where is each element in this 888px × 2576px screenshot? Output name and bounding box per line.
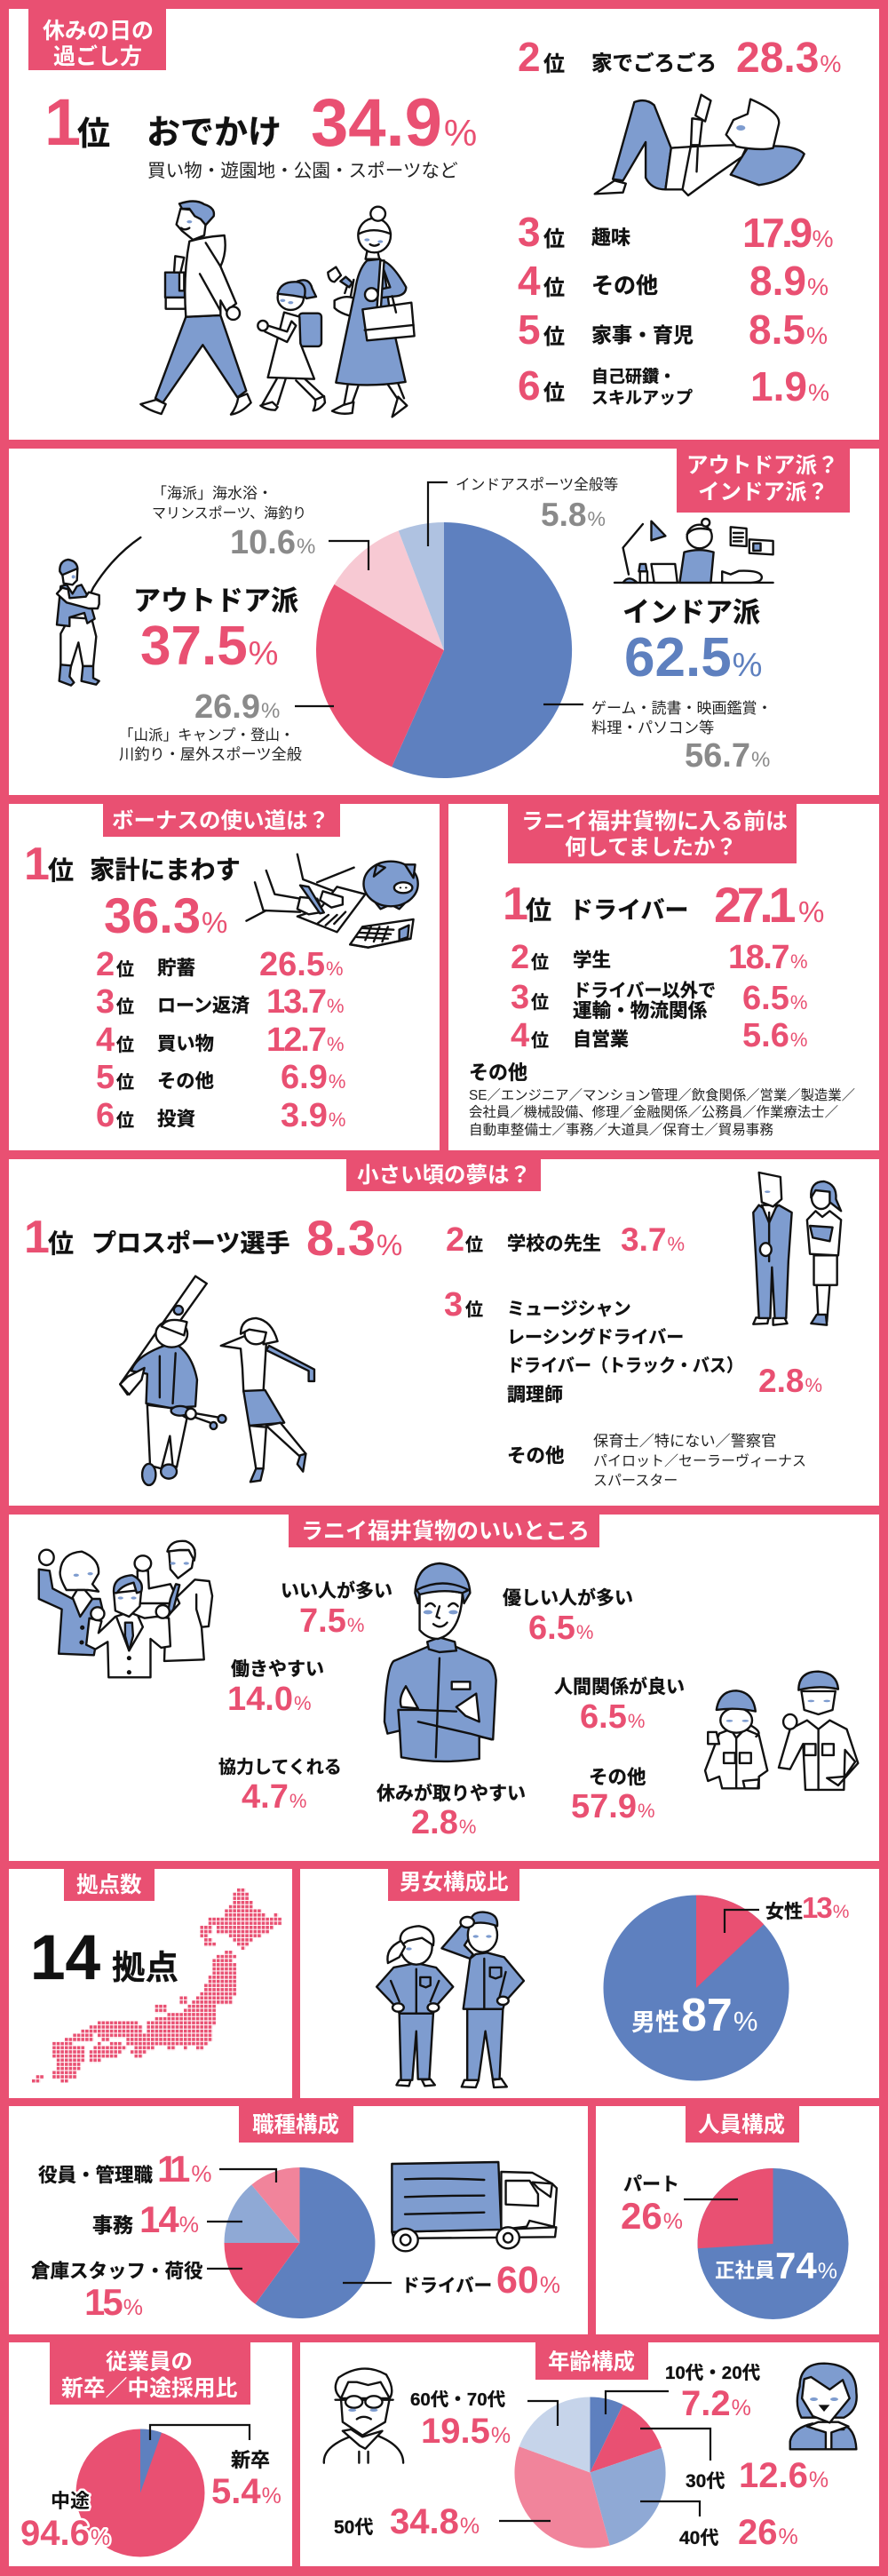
callout: mountain: 26.9% bbox=[194, 688, 280, 726]
rank 3 row: ミュージシャン bbox=[507, 1300, 631, 1319]
rank 3 row: 位 bbox=[531, 992, 549, 1013]
icon: person at desk bbox=[614, 519, 773, 583]
callout: 50s: 34.8% bbox=[390, 2502, 480, 2541]
heading: holiday: 休みの日の bbox=[43, 19, 154, 44]
heading: previous job: 何してましたか？ bbox=[565, 835, 737, 860]
heading: age: 年齢構成 bbox=[548, 2349, 635, 2374]
callout: 30s: 12.6% bbox=[739, 2456, 829, 2495]
callout: 10s 20s: 7.2% bbox=[681, 2384, 751, 2423]
rank 5 row bbox=[518, 306, 828, 353]
heading: dream: 小さい頃の夢は？ bbox=[357, 1163, 531, 1188]
rank 5 row: 家事・育児 bbox=[591, 323, 694, 346]
rank 5 row: その他 bbox=[157, 1070, 214, 1092]
rank 2 row bbox=[518, 34, 841, 82]
item: kind people bbox=[503, 1587, 633, 1647]
callout: 60s 70s: 60代・70代 bbox=[410, 2389, 505, 2410]
icon: business pair bbox=[753, 1173, 841, 1325]
rank 1 row bbox=[44, 85, 477, 161]
item: other: 57.9% bbox=[571, 1788, 655, 1825]
icon: male and female worker bbox=[377, 1912, 524, 2087]
rank 4 row bbox=[518, 258, 829, 304]
rank 2 row: 位 bbox=[543, 52, 565, 76]
callout: 50s: 50代 bbox=[334, 2517, 373, 2538]
callout: warehouse: 15% bbox=[84, 2281, 143, 2323]
item: other: その他 bbox=[589, 1767, 646, 1788]
item: kind people: 6.5% bbox=[528, 1610, 593, 1647]
callout: mountain: 「山派」キャンプ・登山・ bbox=[119, 727, 295, 743]
callout: managers: 11 % bbox=[157, 2148, 211, 2190]
panel: outdoor or indoor bbox=[9, 449, 879, 795]
rank 5 row: 5 bbox=[96, 1059, 115, 1096]
indoor total: インドア派 bbox=[622, 597, 760, 628]
pie chart: gender bbox=[604, 1896, 789, 2080]
callout: full-time bbox=[715, 2245, 837, 2286]
callout: games: ゲーム・読書・映画鑑賞・ bbox=[591, 700, 773, 717]
rank 2 row bbox=[511, 939, 807, 976]
item: nice people bbox=[281, 1580, 392, 1640]
callout: 40s bbox=[640, 2501, 798, 2552]
rank 4 row bbox=[96, 1022, 344, 1059]
rank 3 row bbox=[444, 1286, 822, 1405]
rank 3 row: 13.7% bbox=[266, 983, 344, 1021]
other dreams: パイロット／セーラーヴィーナス bbox=[593, 1453, 806, 1469]
rank 2 row: 家でごろごろ bbox=[591, 51, 717, 75]
heading: holiday: 過ごし方 bbox=[53, 44, 142, 69]
rank 2 row bbox=[96, 946, 344, 983]
rank 1 note: 買い物・遊園地・公園・スポーツなど bbox=[147, 161, 458, 181]
callout: sea: 10.6% bbox=[230, 524, 315, 561]
location count: 拠点 bbox=[112, 1949, 178, 1986]
callout: 10s 20s bbox=[606, 2363, 760, 2423]
rank 6 row: 1.9% bbox=[750, 363, 829, 409]
callout: men bbox=[631, 1990, 757, 2041]
rank 3 row: 位 bbox=[543, 227, 565, 251]
callout: women: 女性 bbox=[765, 1902, 803, 1922]
heading: locations: 拠点数 bbox=[76, 1872, 142, 1897]
heading: previous job bbox=[508, 804, 797, 863]
callout: indoor sports: 5.8% bbox=[541, 497, 606, 533]
heading: age bbox=[535, 2342, 648, 2380]
rank 5 row: 6.9% bbox=[281, 1059, 345, 1096]
callout: 60s 70s: 19.5% bbox=[421, 2412, 511, 2451]
heading: staff composition bbox=[686, 2106, 799, 2143]
heading: gender: 男女構成比 bbox=[400, 1870, 508, 1895]
callout: warehouse bbox=[31, 2261, 242, 2323]
rank 1 row bbox=[503, 877, 824, 933]
heading: outdoor indoor: インドア派？ bbox=[698, 481, 829, 505]
rank 2 row: 2 bbox=[446, 1221, 464, 1259]
rank 6 row: 自己研鑽・ bbox=[591, 367, 676, 386]
callout: mountain bbox=[119, 688, 334, 763]
other jobs: その他 bbox=[469, 1061, 527, 1084]
rank 4 row: 8.9% bbox=[749, 258, 829, 304]
rank 6 row: 位 bbox=[543, 381, 565, 405]
item: relationships bbox=[554, 1676, 685, 1736]
callout: 10s 20s: 10代・20代 bbox=[665, 2363, 760, 2383]
callout: sea bbox=[152, 485, 369, 570]
rank 6 row: 6 bbox=[518, 362, 541, 409]
item: cooperation bbox=[218, 1757, 342, 1816]
rank 2 row: 位 bbox=[531, 952, 549, 973]
callout: sea: マリンスポーツ、海釣り bbox=[152, 505, 306, 521]
rank 4 row: 4 bbox=[511, 1017, 529, 1054]
callout: mid-career: 中途 bbox=[51, 2490, 90, 2512]
callout: full-time: 74% bbox=[775, 2245, 837, 2286]
rank 3 row: ドライバー以外で bbox=[573, 981, 716, 1001]
rank 1 row: 1 bbox=[24, 1212, 50, 1263]
item: cooperation: 4.7% bbox=[242, 1778, 306, 1816]
rank 3 row: 2.8% bbox=[758, 1363, 822, 1399]
callout: new grads: 新卒 bbox=[231, 2449, 270, 2471]
rank 2 row: 28.3% bbox=[736, 35, 841, 82]
panel: good points bbox=[9, 1515, 879, 1861]
pie chart: staff composition bbox=[698, 2168, 849, 2319]
item: other bbox=[571, 1767, 655, 1825]
rank 4 row: 位 bbox=[116, 1035, 134, 1055]
rank 2 row: 2 bbox=[96, 946, 115, 983]
item: relationships: 人間関係が良い bbox=[554, 1676, 685, 1697]
heading: locations bbox=[64, 1869, 155, 1901]
callout: part-time bbox=[621, 2174, 738, 2237]
rank 1 row: 27.1% bbox=[714, 877, 824, 933]
rank 3 row: 趣味 bbox=[591, 227, 630, 249]
heading: new grad ratio bbox=[50, 2342, 250, 2405]
icon: truck bbox=[392, 2162, 557, 2251]
dot map of Japan bbox=[32, 1888, 282, 2083]
pie chart: job types bbox=[224, 2167, 375, 2318]
callout: 40s: 26% bbox=[738, 2513, 798, 2552]
outdoor total bbox=[133, 585, 298, 677]
heading: gender bbox=[388, 1869, 519, 1901]
callout: 30s bbox=[640, 2429, 829, 2495]
heading: job types bbox=[239, 2106, 353, 2143]
heading: new grad ratio: 新卒／中途採用比 bbox=[61, 2376, 238, 2401]
rank 2 row: 学校の先生 bbox=[507, 1233, 601, 1254]
panel: childhood dream bbox=[9, 1159, 879, 1506]
callout: mid-career: 94.6% bbox=[20, 2514, 110, 2553]
rank 3 row: レーシングドライバー bbox=[507, 1326, 684, 1348]
item: cooperation: 協力してくれる bbox=[218, 1757, 342, 1777]
heading: previous job: ラニイ福井貨物に入る前は bbox=[521, 809, 788, 834]
callout: 60s 70s bbox=[410, 2389, 558, 2451]
other dreams bbox=[507, 1432, 806, 1489]
callout: new grads: 5.4% bbox=[211, 2472, 281, 2511]
heading: bonus bbox=[103, 804, 340, 837]
rank 6 row bbox=[96, 1097, 345, 1134]
panel: gender bbox=[300, 1869, 879, 2098]
rank 3 row: 3 bbox=[444, 1286, 463, 1324]
rank 5 row: 位 bbox=[116, 1072, 134, 1093]
icon: central worker bbox=[385, 1563, 496, 1761]
rank 3 row: 運輸・物流関係 bbox=[573, 999, 708, 1022]
item: time off: 2.8% bbox=[411, 1804, 476, 1841]
other dreams: 保育士／特にない／警察官 bbox=[593, 1432, 776, 1450]
callout: men: 87% bbox=[681, 1990, 757, 2041]
rank 5 row: 8.5% bbox=[749, 306, 828, 353]
rank 3 row: 3 bbox=[96, 983, 115, 1021]
rank 1 row: プロスポーツ選手 bbox=[91, 1229, 289, 1257]
rank 3 row: 位 bbox=[116, 997, 134, 1017]
callout: office bbox=[92, 2198, 242, 2240]
rank 1 row: 8.3% bbox=[306, 1210, 402, 1266]
callout: games bbox=[543, 700, 773, 775]
item: nice people: いい人が多い bbox=[281, 1580, 392, 1602]
callout: office: 事務 bbox=[92, 2214, 133, 2237]
heading: outdoor indoor: アウトドア派？ bbox=[686, 454, 838, 478]
panel: age composition bbox=[300, 2342, 879, 2566]
callout: women bbox=[725, 1891, 849, 1933]
rank 6 row: 3.9% bbox=[281, 1097, 345, 1134]
rank 3 row: 3 bbox=[511, 979, 529, 1016]
panel: previous job bbox=[448, 804, 879, 1150]
other jobs: SE／エンジニア／マンション管理／飲食関係／営業／製造業／ bbox=[469, 1087, 855, 1103]
callout: part-time: パート bbox=[623, 2174, 679, 2195]
rank 4 row: 12.7% bbox=[266, 1022, 344, 1059]
rank 2 row: 位 bbox=[465, 1235, 483, 1255]
icon: cheering office group bbox=[39, 1541, 212, 1677]
rank 3 row: 3 bbox=[518, 209, 541, 255]
rank 2 row: 26.5% bbox=[259, 946, 344, 983]
callout: sea: 「海派」海水浴・ bbox=[152, 485, 273, 502]
rank 4 row bbox=[511, 1017, 807, 1054]
callout: warehouse: 倉庫スタッフ・荷役 bbox=[31, 2261, 203, 2282]
rank 4 row: その他 bbox=[591, 274, 658, 298]
outdoor total: 37.5% bbox=[140, 616, 278, 677]
item: easy to work: 14.0% bbox=[227, 1681, 312, 1718]
rank 2 row: 3.7% bbox=[621, 1221, 685, 1258]
callout: 30s: 30代 bbox=[686, 2471, 725, 2492]
callout: office: 14% bbox=[139, 2198, 199, 2240]
icon: young woman bbox=[790, 2364, 857, 2449]
rank 3 row: 位 bbox=[465, 1300, 483, 1320]
indoor total bbox=[622, 597, 762, 688]
callout: part-time: 26% bbox=[621, 2195, 683, 2237]
heading: outdoor indoor bbox=[677, 449, 850, 513]
rank 4 row: 買い物 bbox=[157, 1033, 214, 1054]
panel: locations bbox=[9, 1869, 292, 2098]
other jobs: 自動車整備士／事務／大道具／保育士／貿易事務 bbox=[469, 1122, 773, 1138]
callout: games: 56.7% bbox=[685, 737, 770, 775]
heading: holiday bbox=[28, 9, 166, 70]
rank 3 row: 6.5% bbox=[742, 980, 807, 1017]
item: kind people: 優しい人が多い bbox=[503, 1587, 633, 1609]
rank 1 row: 位 bbox=[48, 1229, 74, 1259]
rank 4 row: 4 bbox=[96, 1022, 115, 1059]
item: time off bbox=[377, 1783, 526, 1841]
heading: job types: 職種構成 bbox=[252, 2112, 339, 2137]
rank 2 row: 2 bbox=[518, 34, 541, 80]
rank 1 row: 36.3% bbox=[104, 887, 227, 943]
item: time off: 休みが取りやすい bbox=[377, 1783, 526, 1804]
rank 6 row: 投資 bbox=[157, 1109, 195, 1130]
rank 3 row bbox=[511, 979, 807, 1022]
icon: older man bbox=[324, 2369, 403, 2463]
rank 3 row: ドライバー（トラック・バス） bbox=[507, 1356, 743, 1376]
rank 1 row: 34.9% bbox=[311, 85, 477, 161]
pie chart: new grad ratio bbox=[76, 2429, 204, 2556]
pie chart: age bbox=[514, 2397, 666, 2548]
rank 6 row: 6 bbox=[96, 1097, 115, 1134]
callout: 40s: 40代 bbox=[679, 2528, 718, 2548]
panel: job types bbox=[9, 2106, 588, 2334]
rank 4 row: 自営業 bbox=[573, 1030, 629, 1050]
other dreams: スパースター bbox=[593, 1473, 678, 1489]
item: easy to work: 働きやすい bbox=[231, 1659, 324, 1680]
callout: mid-career bbox=[20, 2490, 110, 2553]
callout: 50s bbox=[334, 2502, 551, 2541]
icon: piggy bank and paperwork bbox=[246, 855, 418, 948]
rank 2 row: 位 bbox=[116, 959, 134, 980]
rank 3 row: ローン返済 bbox=[157, 996, 250, 1016]
icon: pair of workers bbox=[705, 1672, 858, 1790]
rank 6 row bbox=[518, 362, 829, 409]
item: nice people: 7.5% bbox=[299, 1602, 364, 1640]
rank 3 row: 調理師 bbox=[507, 1385, 563, 1405]
callout: indoor sports: インドアスポーツ全般等 bbox=[456, 476, 618, 493]
rank 3 row: 17.9% bbox=[742, 210, 834, 256]
rank 5 row: 位 bbox=[543, 325, 565, 349]
callout: new grads bbox=[150, 2425, 281, 2511]
rank 1 row bbox=[24, 1210, 402, 1266]
location count bbox=[30, 1923, 178, 1993]
rank 1 row: 1 bbox=[24, 839, 50, 890]
rank 1 row: 1 bbox=[503, 879, 528, 930]
heading: bonus: ボーナスの使い道は？ bbox=[112, 808, 329, 833]
callout: drivers: ドライバー bbox=[401, 2276, 492, 2296]
callout: men: 男性 bbox=[631, 2009, 679, 2036]
rank 2 row: 2 bbox=[511, 939, 529, 976]
rank 6 row: スキルアップ bbox=[591, 388, 693, 408]
panel: staff composition bbox=[596, 2106, 879, 2334]
heading: good points: ラニイ福井貨物のいいところ bbox=[301, 1519, 590, 1544]
rank 5 row bbox=[96, 1059, 345, 1096]
other dreams: その他 bbox=[507, 1445, 565, 1467]
other jobs: 会社員／機械設備、修理／金融関係／公務員／作業療法士／ bbox=[469, 1104, 838, 1120]
callout: indoor sports bbox=[428, 476, 618, 546]
rank 5 row: 5 bbox=[518, 306, 541, 353]
pie chart: outdoor indoor bbox=[316, 522, 572, 778]
rank 1 row: 位 bbox=[526, 896, 551, 926]
rank 4 row: 5.6% bbox=[742, 1017, 807, 1054]
heading: staff composition: 人員構成 bbox=[698, 2112, 785, 2137]
callout: full-time: 正社員 bbox=[715, 2260, 775, 2282]
rank 2 row: 学生 bbox=[573, 950, 611, 971]
callout: managers: 役員・管理職 bbox=[38, 2165, 154, 2186]
rank 2 row: 18.7% bbox=[728, 939, 807, 976]
panel: holiday ranking bbox=[9, 9, 879, 440]
heading: dream bbox=[346, 1159, 541, 1191]
rank 1 row: 位 bbox=[48, 856, 74, 886]
rank 1 row: 1 bbox=[44, 85, 81, 159]
rank 1 row: ドライバー bbox=[569, 897, 688, 924]
outdoor total: アウトドア派 bbox=[133, 585, 298, 616]
icon: walking family bbox=[140, 201, 415, 417]
callout: managers bbox=[38, 2148, 276, 2190]
other jobs bbox=[469, 1061, 855, 1138]
rank 4 row: 位 bbox=[543, 276, 565, 300]
rank 2 row bbox=[446, 1221, 685, 1259]
rank 1 row bbox=[24, 839, 241, 943]
rank 4 row: 位 bbox=[531, 1030, 549, 1051]
heading: new grad ratio: 従業員の bbox=[106, 2349, 193, 2374]
rank 1 row: 位 bbox=[77, 115, 110, 152]
icon: ski and golf bbox=[120, 1276, 314, 1485]
icon: fisherman bbox=[57, 537, 140, 686]
rank 6 row: 位 bbox=[116, 1110, 134, 1131]
rank 4 row: 4 bbox=[518, 258, 541, 304]
callout: mountain: 川釣り・屋外スポーツ全般 bbox=[119, 745, 302, 763]
rank 2 row: 貯蓄 bbox=[157, 958, 195, 979]
callout: women: 13% bbox=[802, 1891, 849, 1924]
callout: games: 料理・パソコン等 bbox=[591, 719, 714, 736]
rank 1 row: おでかけ bbox=[147, 115, 281, 152]
item: relationships: 6.5% bbox=[580, 1698, 645, 1736]
callout: drivers: 60% bbox=[496, 2259, 560, 2302]
indoor total: 62.5% bbox=[624, 627, 762, 688]
callout: drivers bbox=[343, 2259, 560, 2302]
panel: bonus bbox=[9, 804, 440, 1150]
location count: 14 bbox=[30, 1923, 100, 1993]
item: easy to work bbox=[227, 1659, 324, 1718]
icon: man lying with phone bbox=[595, 95, 805, 195]
rank 1 row: 家計にまわす bbox=[90, 855, 241, 884]
rank 3 row bbox=[96, 983, 344, 1021]
rank 3 row bbox=[518, 209, 834, 256]
panel: new grad ratio bbox=[9, 2342, 292, 2566]
